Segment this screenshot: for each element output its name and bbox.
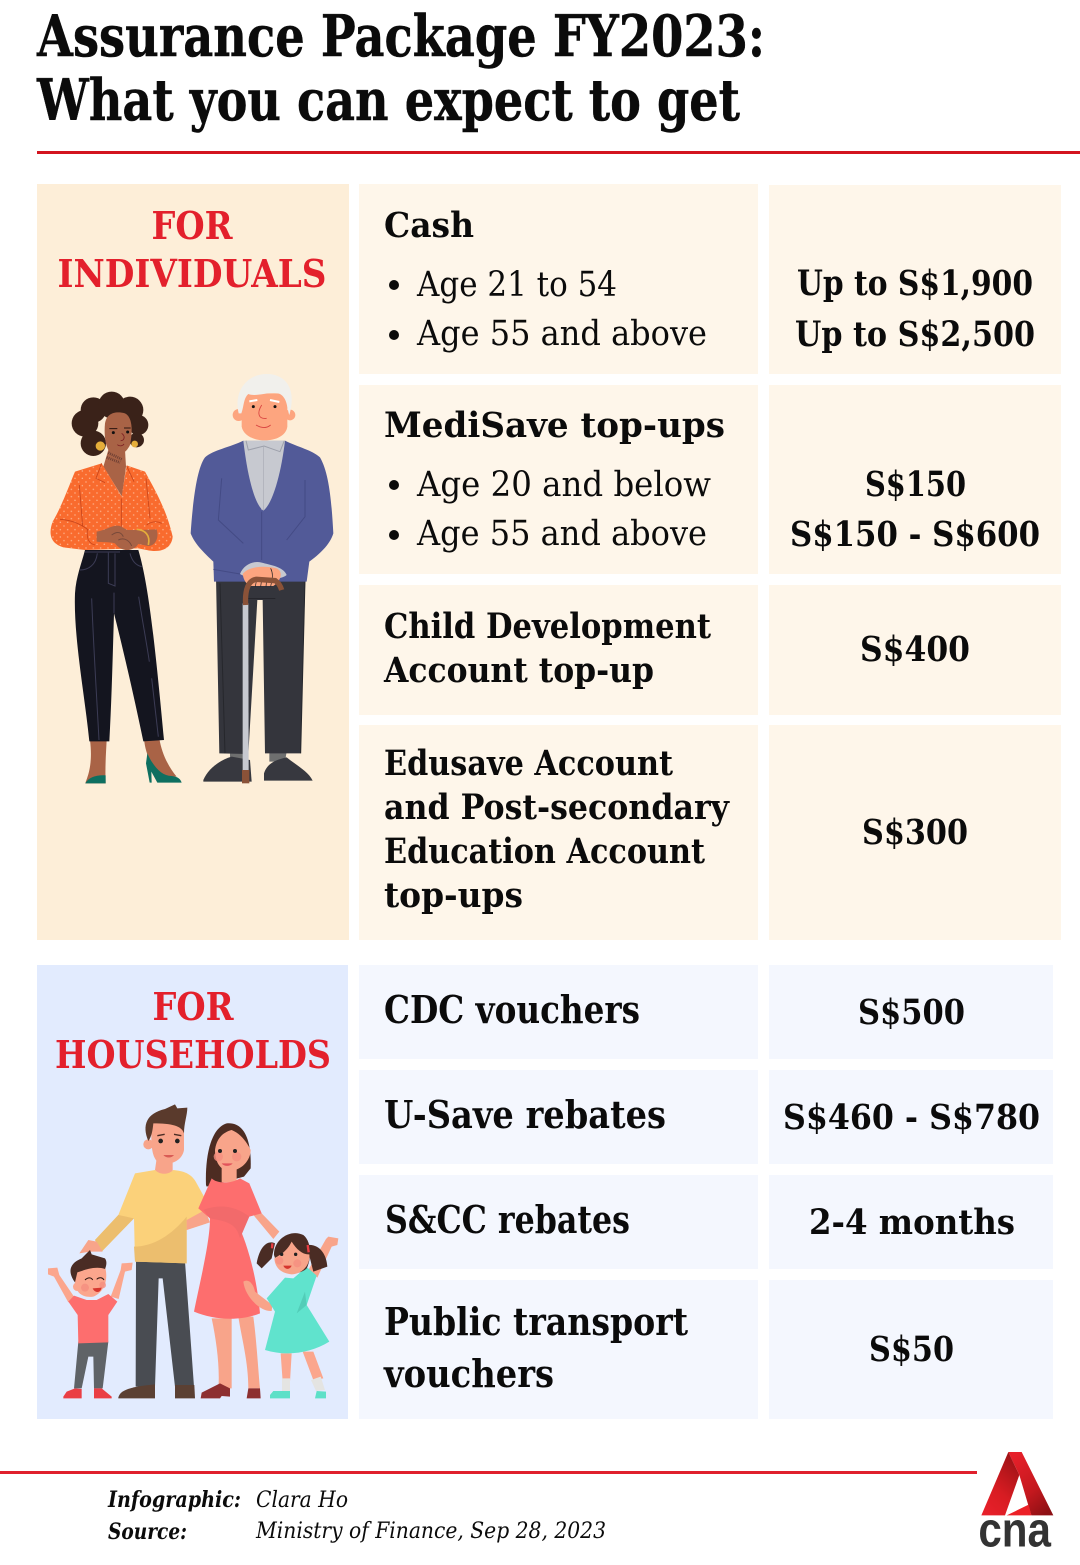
- heading: for individuals: FOR: [152, 203, 233, 248]
- illustration: woman and older man: [51, 374, 333, 783]
- row: public transport vouchers: vouchers: [383, 1351, 554, 1396]
- row: public transport vouchers: Public transport: [384, 1299, 688, 1344]
- credits: [107, 1487, 606, 1545]
- heading: for individuals: INDIVIDUALS: [58, 251, 326, 296]
- boy: [48, 1250, 133, 1398]
- heading: for households: HOUSEHOLDS: [55, 1032, 331, 1077]
- panel: for households: [37, 965, 348, 1419]
- panel background: [37, 965, 348, 1419]
- older man: [191, 374, 333, 783]
- row: s&cc rebates: [359, 1175, 1053, 1269]
- title: What you can expect to get: [36, 67, 741, 134]
- row: cdc vouchers: S$500: [858, 992, 965, 1033]
- credits: Clara Ho: [256, 1488, 348, 1513]
- row: medisave top-ups: S$150 - S$600: [790, 514, 1040, 555]
- icon: cna logo: cna: [978, 1503, 1051, 1558]
- row: edusave: top-ups: [384, 875, 523, 916]
- row: cash: Cash: [384, 205, 474, 246]
- title: Assurance Package FY2023:: [36, 3, 765, 70]
- row: medisave top-ups: [359, 385, 1061, 574]
- credits: Infographic:: [107, 1487, 241, 1513]
- panel: for individuals: [37, 184, 349, 940]
- row: edusave: and Post-secondary: [384, 787, 730, 828]
- row: public transport vouchers: S$50: [869, 1329, 954, 1370]
- row: medisave top-ups: Age 20 and below: [416, 465, 711, 505]
- row: edusave: Education Account: [384, 831, 705, 872]
- credits: Source:: [108, 1519, 187, 1545]
- row: child development account: Child Development: [384, 606, 711, 647]
- row: cash: Up to S$1,900: [797, 263, 1033, 304]
- girl: [243, 1233, 338, 1398]
- mother: [187, 1123, 279, 1398]
- row: child development account: [359, 585, 1061, 715]
- heading: for households: [55, 984, 331, 1077]
- row: u-save rebates: S$460 - S$780: [783, 1097, 1040, 1138]
- panel background: [37, 184, 349, 940]
- icon: cna logo: [978, 1452, 1053, 1558]
- credits: Ministry of Finance, Sep 28, 2023: [255, 1519, 606, 1544]
- illustration: family: [48, 1104, 338, 1398]
- row: cdc vouchers: CDC vouchers: [384, 987, 640, 1032]
- row: cash: Up to S$2,500: [795, 314, 1035, 355]
- heading: for individuals: [58, 203, 326, 296]
- row: cash: Age 55 and above: [416, 314, 707, 354]
- row: edusave: S$300: [862, 812, 968, 853]
- row: medisave top-ups: S$150: [865, 464, 966, 505]
- woman: [51, 392, 182, 783]
- title: [36, 3, 765, 134]
- father: [79, 1104, 207, 1398]
- row: cash: Age 21 to 54: [416, 265, 617, 305]
- row: edusave: [359, 725, 1061, 940]
- row: medisave top-ups: Age 55 and above: [416, 514, 707, 554]
- row: child development account: Account top-up: [383, 650, 654, 691]
- row: edusave: Edusave Account: [384, 743, 673, 784]
- row: cdc vouchers: [359, 965, 1053, 1059]
- row: s&cc rebates: S&CC rebates: [385, 1197, 630, 1242]
- row: medisave top-ups: MediSave top-ups: [384, 405, 725, 446]
- row: s&cc rebates: 2-4 months: [809, 1202, 1015, 1243]
- row: u-save rebates: U-Save rebates: [384, 1092, 666, 1137]
- row: public transport vouchers: [359, 1280, 1053, 1419]
- row: u-save rebates: [359, 1070, 1053, 1164]
- heading: for households: FOR: [152, 984, 234, 1029]
- row: cash: [359, 184, 1061, 374]
- row: child development account: S$400: [860, 629, 970, 670]
